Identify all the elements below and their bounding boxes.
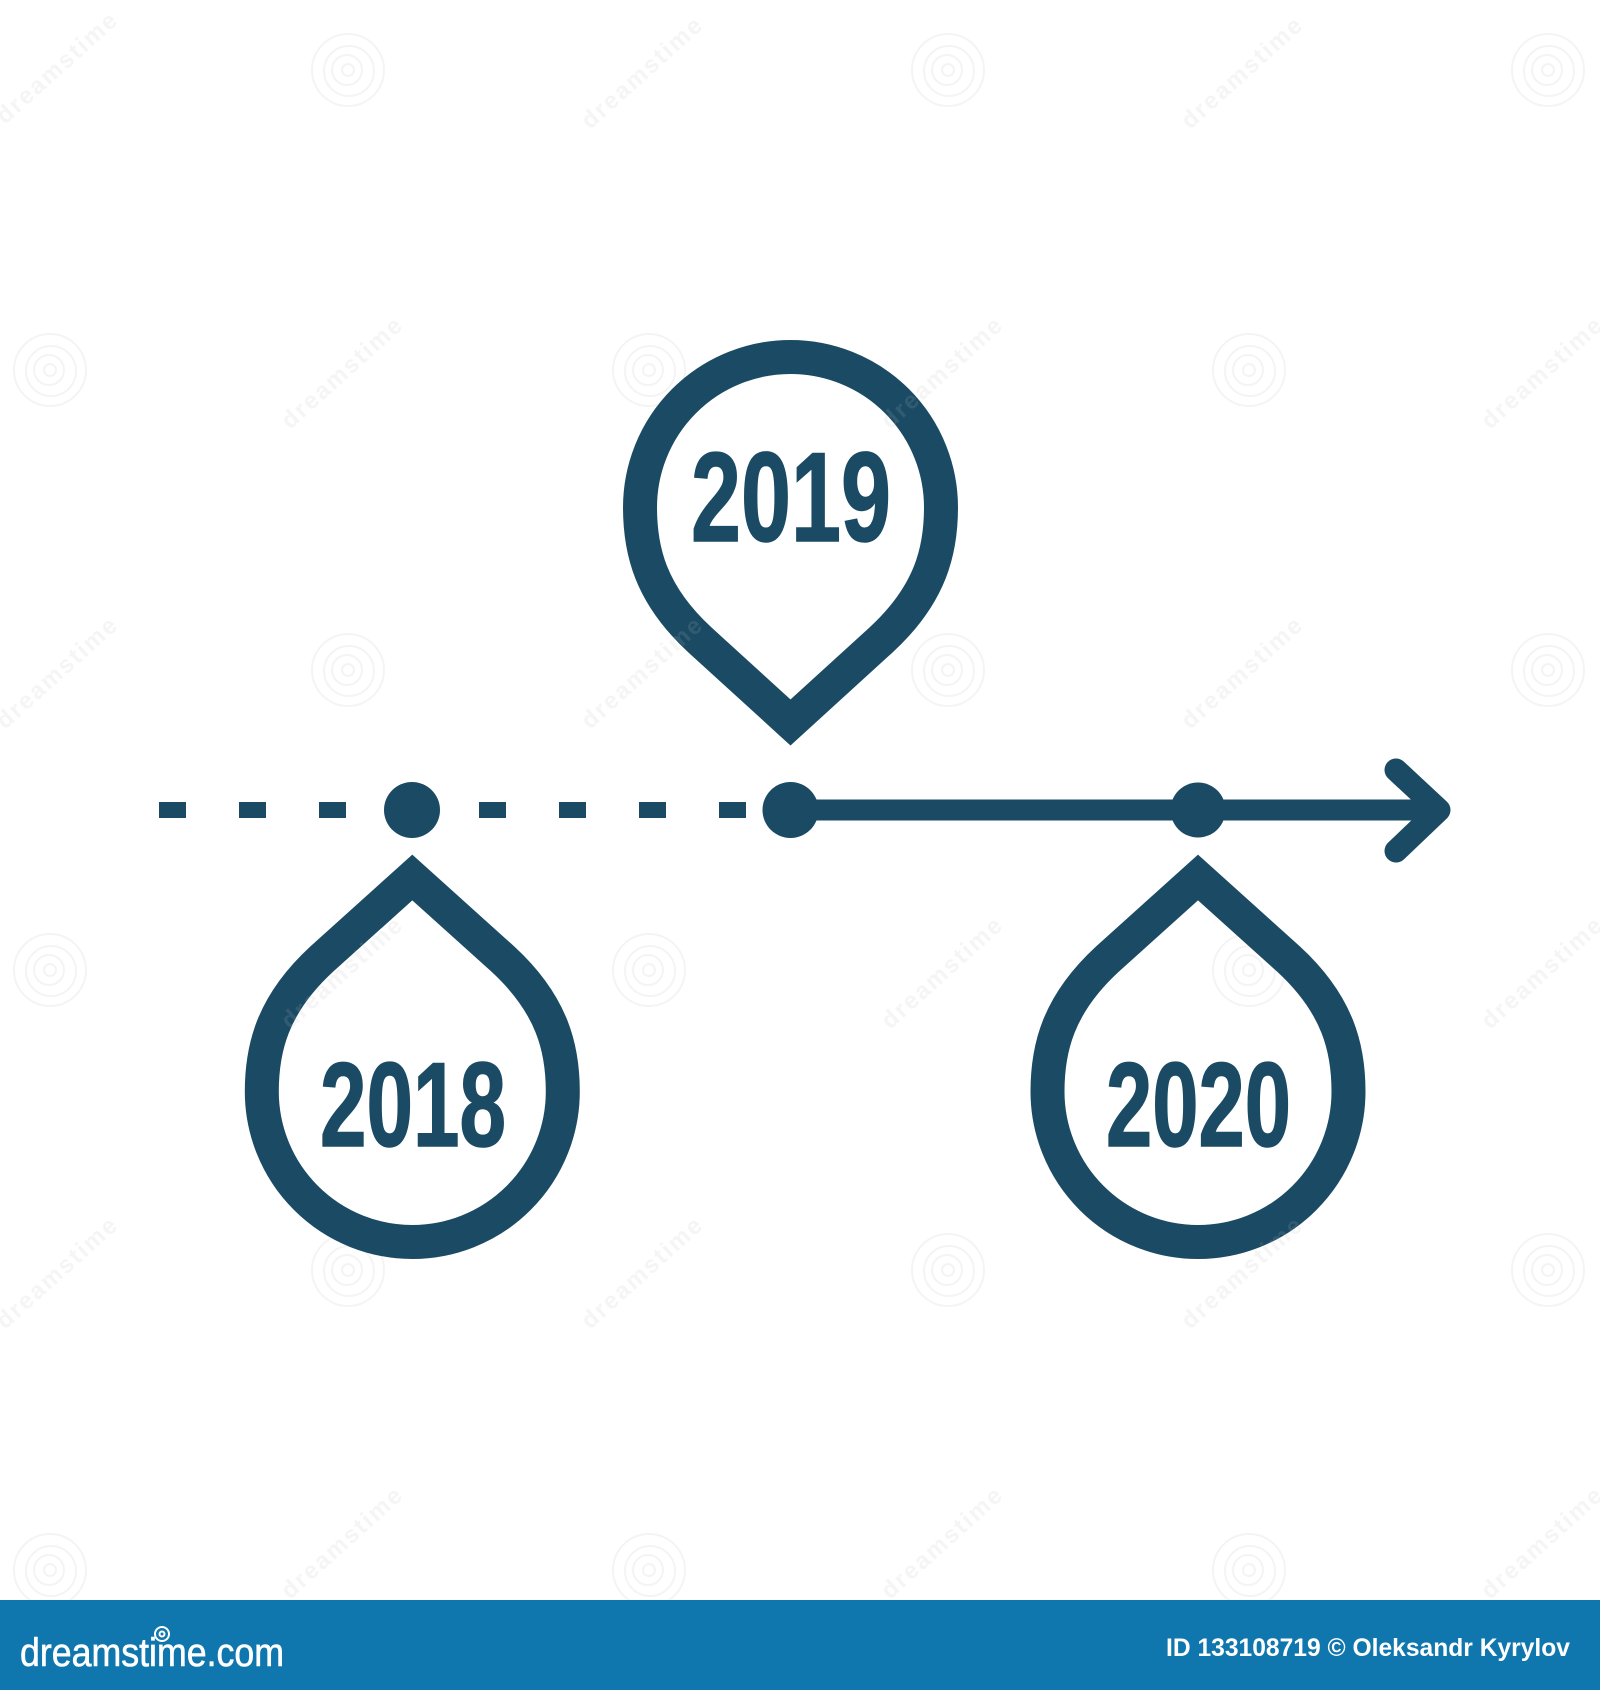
text: dreamstime xyxy=(876,1481,1009,1604)
text: dreamstime xyxy=(276,911,409,1034)
text: dreamstime xyxy=(276,311,409,434)
arrow head xyxy=(1396,770,1439,851)
marker: 2019 pin xyxy=(640,357,941,722)
marker: 2018 drop xyxy=(262,878,563,1242)
year label 2018: 2018 xyxy=(320,1038,506,1172)
timeline dot 2020 xyxy=(1170,782,1226,838)
text: dreamstime xyxy=(276,1481,409,1604)
year label 2020: 2020 xyxy=(1106,1038,1291,1172)
icon: logo spiral xyxy=(155,1627,169,1641)
marker: 2020 drop xyxy=(1048,878,1348,1242)
footer bar xyxy=(0,1600,1600,1690)
text: dreamstime xyxy=(576,611,709,734)
year label 2019: 2019 xyxy=(691,426,891,568)
text: dreamstime xyxy=(876,911,1009,1034)
text: dreamstime xyxy=(1176,611,1309,734)
text: dreamstime xyxy=(1176,1211,1309,1334)
text: dreamstime xyxy=(576,1211,709,1334)
timeline with dashed past segment, solid future segment and arrow xyxy=(159,770,1439,851)
dashed line segment xyxy=(159,802,746,818)
image id and credit: ID 133108719 © Oleksandr Kyrylov xyxy=(1166,1634,1570,1662)
solid line segment xyxy=(790,800,1435,820)
dreamstime logo: dreamstime.com xyxy=(20,1631,284,1675)
text: dreamstime xyxy=(576,11,709,134)
text: dreamstime xyxy=(1176,11,1309,134)
text: dreamstime xyxy=(876,311,1009,434)
timeline dot 2018 xyxy=(384,782,440,838)
timeline dot 2019 xyxy=(762,782,818,838)
